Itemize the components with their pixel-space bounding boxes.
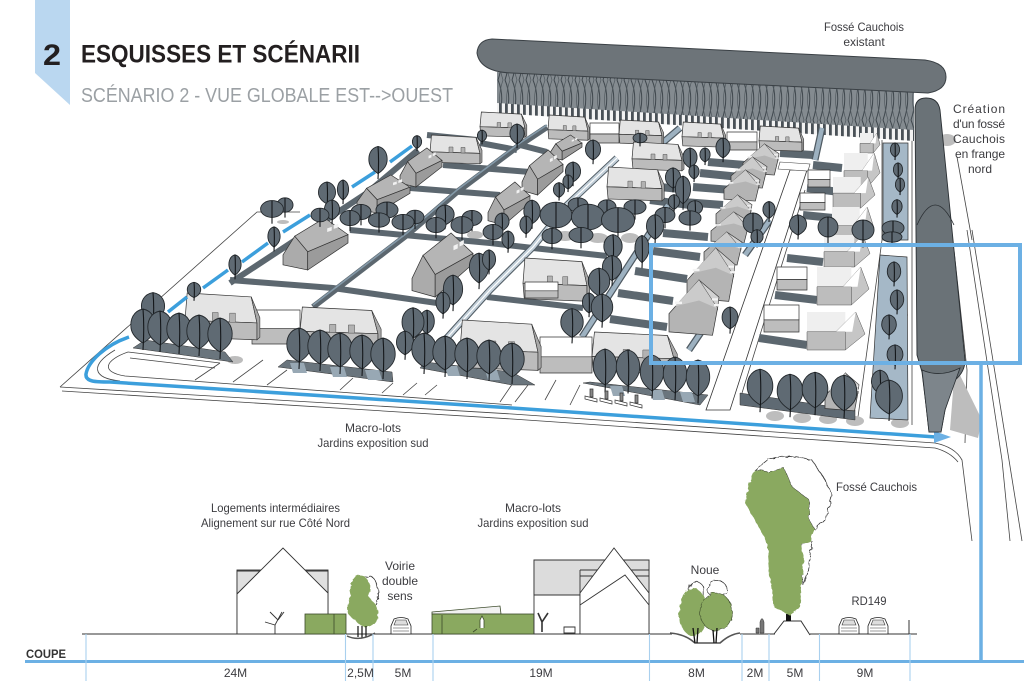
label: voirie double sens: Voirie [385,559,415,573]
section labels: Logements intermédiaires [211,501,340,515]
label: Fossé Cauchois section: Fossé Cauchois [836,480,917,494]
dimension ticks [86,634,910,681]
label: Macro-lots: Jardins exposition sud [318,436,428,450]
label: Macro-lots: Macro-lots [345,421,401,435]
label: voirie double sens: sens [387,589,413,603]
label: voirie double sens: double [382,574,418,588]
street tree [347,575,378,638]
section house two [534,548,649,634]
bottom hedge strips [133,340,855,420]
subtitle: SCÉNARIO 2 - VUE GLOBALE EST-->OUEST [81,84,453,107]
label: noue: Noue [691,563,720,577]
new Fossé Cauchois hedge [915,98,965,432]
label: RD149: RD149 [852,594,887,608]
west row of pitched houses [283,135,582,297]
road post [908,620,910,634]
dimensions: 8M [688,666,705,680]
header ribbon with number: 2 [43,39,61,72]
street trees [131,124,905,421]
coupe label: COUPE [26,647,66,661]
dimensions: 19M [529,666,553,680]
hedge one [305,614,346,634]
street and hedge grid [230,125,842,350]
noue trees [679,581,732,643]
zoom frame [651,245,1020,363]
eastern houses [764,133,880,411]
cars on RD149 [839,618,888,634]
lot access strip [778,162,810,171]
site boundary lines [60,140,1022,541]
noue ground [670,633,740,643]
label: macro-lots section: Macro-lots [505,501,561,515]
label: Fossé Cauchois existant: Fossé Cauchois [824,20,904,34]
label: création d'un fossé: nord [968,162,992,176]
cross-section [82,456,917,643]
dimensions: 5M [395,666,411,680]
bicycle racks [585,389,642,408]
label: création d'un fossé: d'un fossé [953,117,1005,131]
dimensions: 2M [747,666,763,680]
label: création d'un fossé: Cauchois [953,132,1005,146]
blue road with arrow [86,146,951,443]
tree shadows [227,134,982,438]
section labels: Alignement sur rue Côté Nord [201,516,350,530]
mound with tall tree [745,456,832,635]
label: Fossé Cauchois existant: existant [843,35,885,49]
north row of houses [430,112,804,201]
existing Fossé Cauchois hedge [477,39,946,141]
header ribbon with number [35,0,70,105]
pedestrians [756,618,764,633]
label: macro-lots section: Jardins exposition sud [478,516,588,530]
eastern noue strip [870,143,908,420]
baseline [25,660,1024,663]
central white road [706,170,807,410]
dimensions: 9M [857,666,873,680]
coupe scale [25,634,1024,681]
hedge two with roof [432,606,534,634]
aerial view of the site [60,39,1022,541]
ground line [82,633,157,635]
car [391,618,411,634]
dimensions: 2,5M [347,666,374,680]
connector line to section [979,363,983,661]
dimensions: 5M [787,666,803,680]
section house one [237,548,328,634]
label: création d'un fossé: en frange [955,147,1005,161]
dimensions: 24M [224,666,247,680]
noue strips [445,158,617,340]
label: création d'un fossé: Création [953,102,1005,116]
central gabled houses [669,144,779,335]
south row of houses [185,258,677,374]
title: ESQUISSES ET SCÉNARII [81,40,360,68]
